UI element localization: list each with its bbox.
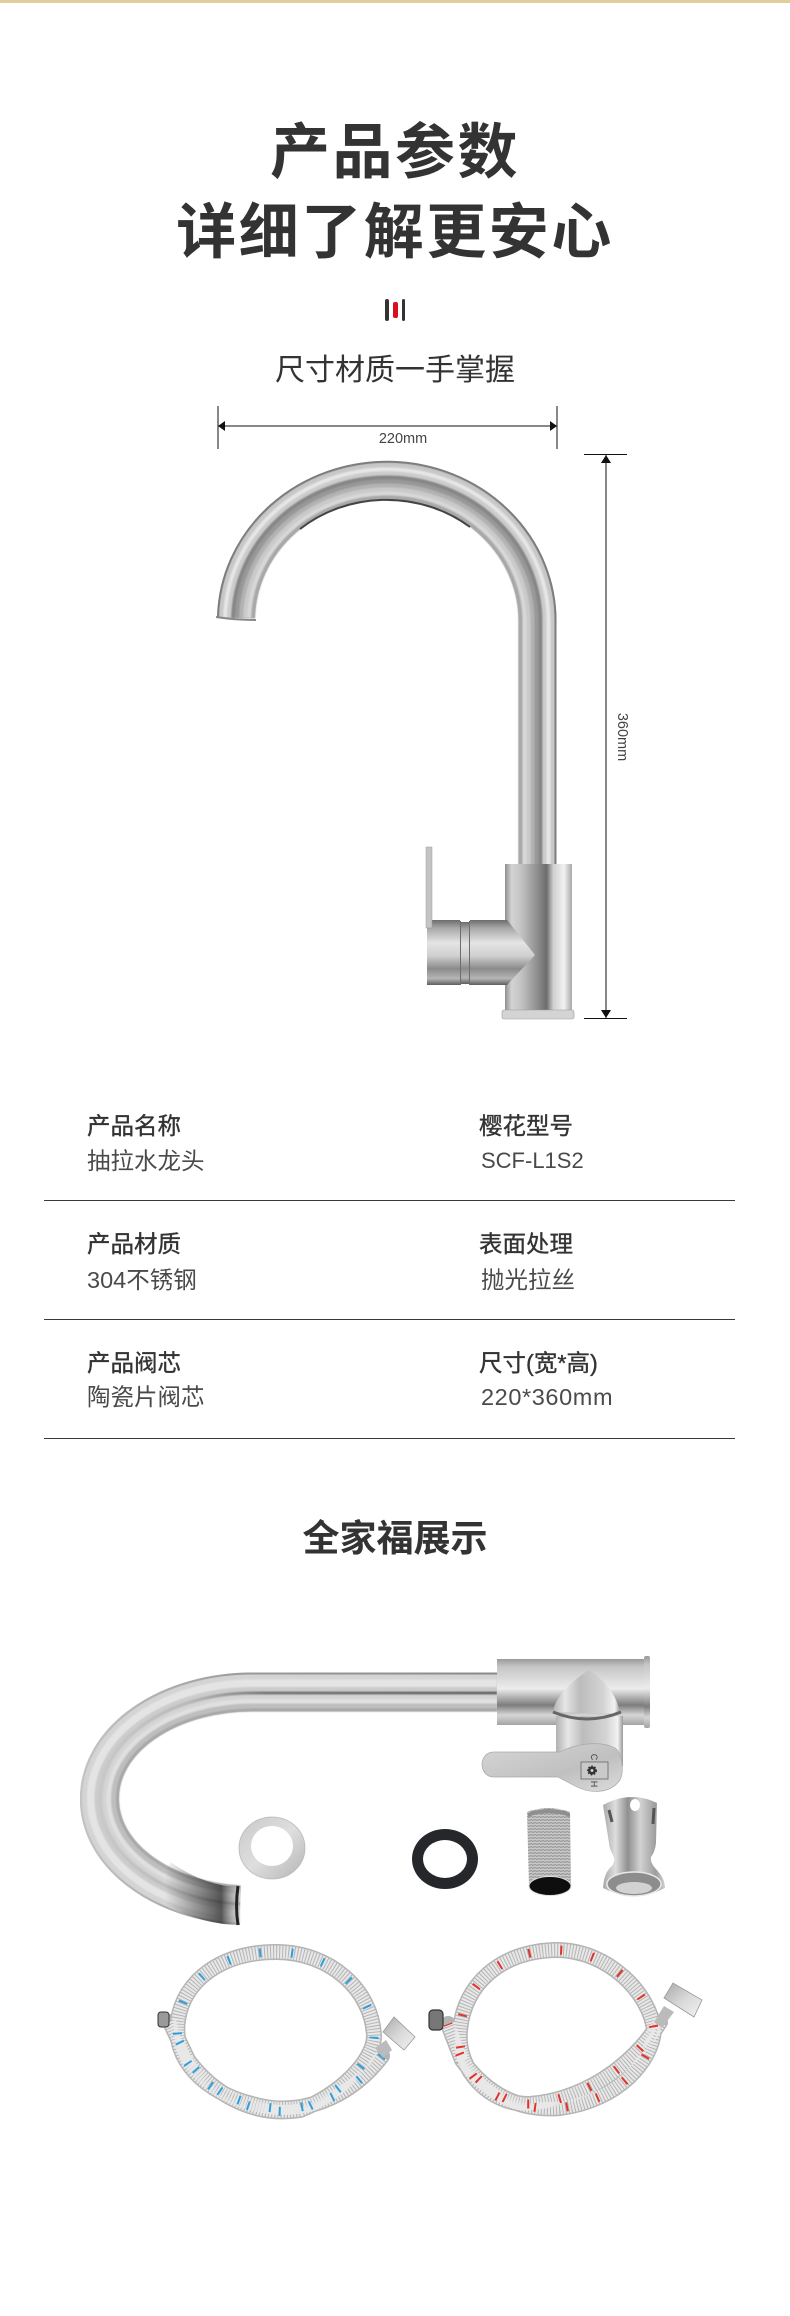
logo square bbox=[581, 1762, 608, 1779]
mesh filter bbox=[527, 1808, 571, 1896]
metal cup bbox=[603, 1797, 665, 1896]
spec row 3 bbox=[44, 1350, 735, 1439]
vertical dimension: 360mm: 360mm bbox=[614, 713, 630, 761]
subtitle: 尺寸材质一手掌握 bbox=[275, 354, 515, 387]
value: material: 304不锈钢 bbox=[87, 1267, 197, 1293]
heading: family showcase: 全家福展示 bbox=[302, 1518, 488, 1559]
value: valve core: 陶瓷片阀芯 bbox=[87, 1384, 204, 1410]
faucet spout pipe bbox=[216, 462, 556, 866]
faucet lever bbox=[426, 847, 432, 928]
red braided hose bbox=[429, 1950, 702, 2108]
spec row 1 bbox=[44, 1113, 735, 1201]
value: product name: 抽拉水龙头 bbox=[87, 1148, 204, 1174]
title bbox=[176, 119, 614, 266]
horizontal dimension: 220mm: 220mm bbox=[379, 431, 427, 447]
cylinder body and cap bbox=[497, 1656, 650, 1728]
black rubber ring bbox=[412, 1829, 478, 1889]
handle and lever with logo bbox=[482, 1670, 623, 1791]
red hose fittings bbox=[429, 1983, 702, 2030]
title: 产品参数 bbox=[270, 119, 520, 186]
faucet handle body bbox=[427, 920, 535, 985]
vertical dimension: 360mm bbox=[584, 454, 630, 1018]
label: dimensions: 尺寸(宽*高) bbox=[479, 1350, 598, 1376]
family photo: parts bbox=[81, 1656, 665, 1925]
value: model: SCF-L1S2 bbox=[481, 1148, 584, 1173]
handle and lever with logo: C bbox=[589, 1754, 599, 1761]
silver ring bbox=[239, 1817, 305, 1879]
handle and lever with logo: H bbox=[589, 1781, 599, 1787]
label: product name: 产品名称 bbox=[87, 1113, 181, 1139]
value: dimensions: 220*360mm bbox=[481, 1384, 613, 1410]
blue braided hose bbox=[158, 1952, 415, 2111]
top gold bar bbox=[0, 0, 790, 3]
faucet column and base bbox=[502, 864, 574, 1019]
spec row 2 bbox=[44, 1231, 735, 1320]
value: surface: 抛光拉丝 bbox=[481, 1267, 575, 1293]
label: material: 产品材质 bbox=[87, 1231, 181, 1257]
title: 详细了解更安心 bbox=[176, 199, 614, 266]
horizontal dimension: 220mm bbox=[218, 406, 557, 449]
label: valve core: 产品阀芯 bbox=[87, 1350, 181, 1376]
icon: three bars divider bbox=[385, 299, 405, 321]
blue hose fittings bbox=[158, 2012, 415, 2058]
faucet side view bbox=[216, 462, 574, 1019]
spout tube bbox=[81, 1674, 497, 1925]
label: surface: 表面处理 bbox=[479, 1231, 573, 1257]
label: model: 樱花型号 bbox=[479, 1113, 573, 1139]
